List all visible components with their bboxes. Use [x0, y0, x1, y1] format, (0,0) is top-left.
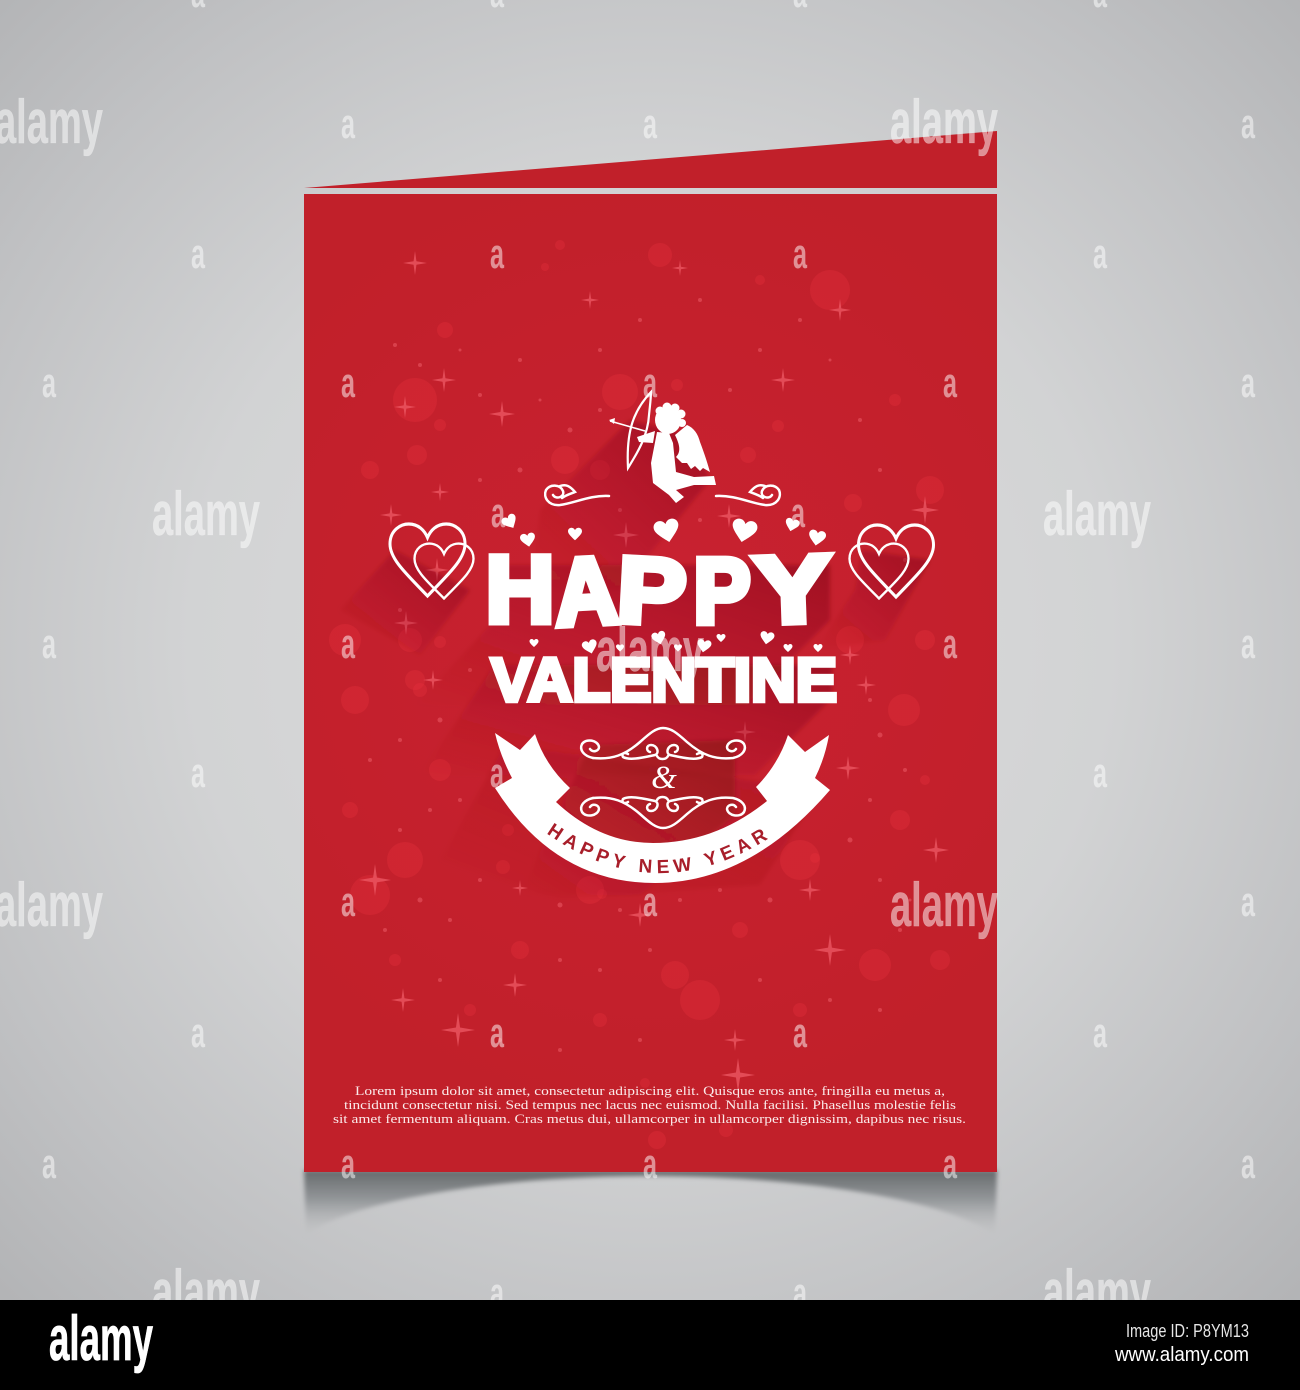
small watermark marks: a	[1093, 749, 1107, 796]
small watermark marks: a	[791, 489, 805, 536]
small watermark marks: a	[341, 878, 355, 925]
small watermark marks: a	[490, 230, 504, 277]
large watermarks: alamy	[152, 480, 260, 549]
title: HAPPY: P	[693, 539, 751, 643]
footer image id: Image ID: P8YM13	[1126, 1321, 1249, 1341]
long shadows	[340, 420, 930, 900]
small watermark marks: a	[191, 1009, 205, 1056]
large watermarks: alamy	[890, 871, 998, 940]
small hearts between title lines	[530, 630, 822, 655]
small watermark marks: a	[643, 100, 657, 147]
small watermark marks: a	[943, 359, 957, 406]
small watermark marks: a	[191, 230, 205, 277]
ribbon text: Happy New Year: HAPPY NEW YEAR	[547, 823, 768, 874]
small watermark marks: a	[341, 620, 355, 667]
ampersand: &	[651, 760, 677, 796]
small watermark marks: a	[1241, 878, 1255, 925]
card back flap	[304, 131, 997, 188]
title: HAPPY: P	[615, 537, 689, 645]
small watermark marks: a	[42, 1140, 56, 1187]
footer website: www.alamy.com	[1114, 1344, 1249, 1366]
large watermarks: alamy	[0, 871, 103, 940]
small watermark marks: a	[1093, 1009, 1107, 1056]
bokeh and sparkle texture	[329, 240, 950, 1149]
small watermark marks: a	[793, 1269, 807, 1316]
body text: lorem ipsum	[333, 1083, 966, 1126]
body text: lorem ipsum: tincidunt consectetur nisi. Sed tempus nec lacus nec euismod. Nulla facilisi. Phasellus molestie felis	[344, 1097, 956, 1112]
small watermark marks: a	[1241, 359, 1255, 406]
large watermarks: alamy	[890, 88, 998, 157]
footer bar	[0, 1300, 1300, 1390]
arrow	[609, 418, 645, 431]
small watermark marks: a	[1241, 620, 1255, 667]
small watermark marks: a	[793, 230, 807, 277]
card front panel	[304, 194, 997, 1172]
large watermarks	[0, 88, 1151, 1327]
ornament above ampersand	[581, 728, 745, 759]
icon: left double heart outline	[390, 524, 474, 598]
small watermark marks: a	[1241, 100, 1255, 147]
card floor shadow	[304, 1170, 997, 1236]
small watermark marks: a	[643, 878, 657, 925]
small watermark marks: a	[1093, 230, 1107, 277]
ornament below ampersand	[581, 797, 745, 828]
cupid wing	[675, 425, 710, 472]
small watermark marks: a	[490, 1009, 504, 1056]
small hearts above title	[500, 512, 827, 548]
small watermark marks: a	[341, 100, 355, 147]
small watermark marks: a	[793, 749, 807, 796]
title: HAPPY: Y	[752, 536, 833, 644]
large watermarks: alamy	[1043, 480, 1151, 549]
small watermark marks: a	[42, 359, 56, 406]
small watermark marks: a	[943, 1140, 957, 1187]
large watermarks: alamy	[0, 88, 103, 157]
cupid head and curls	[655, 402, 686, 434]
title: HAPPY: H	[486, 537, 554, 643]
small watermark marks: a	[341, 1140, 355, 1187]
title: HAPPY: A	[552, 537, 621, 646]
scroll ornaments beside cupid	[545, 485, 780, 505]
small watermark marks: a	[643, 359, 657, 406]
small watermark marks: a	[943, 620, 957, 667]
small watermark marks: a	[490, 749, 504, 796]
large watermarks: alamy	[152, 1258, 260, 1327]
large watermarks: alamy	[596, 616, 704, 685]
small watermark marks: a	[42, 620, 56, 667]
small watermark marks: a	[490, 1269, 504, 1316]
icon: right double heart outline	[850, 525, 934, 598]
large watermarks: alamy	[1043, 1258, 1151, 1327]
small watermark marks: a	[1241, 1140, 1255, 1187]
footer logo: alamy	[49, 1304, 153, 1374]
cupid body and legs	[651, 432, 716, 503]
title: VALENTINE: VALENTINE	[491, 646, 837, 714]
small watermark marks: a	[191, 749, 205, 796]
small watermark marks: a	[491, 489, 505, 536]
cupid arm	[637, 431, 655, 443]
bow	[628, 392, 651, 468]
icon: cupid with bow	[609, 392, 716, 503]
small watermark marks: a	[341, 359, 355, 406]
small watermark marks: a	[793, 1009, 807, 1056]
body text: lorem ipsum: Lorem ipsum dolor sit amet, consectetur adipiscing elit. Quisque eros ante, fringilla eu metus a,	[355, 1083, 945, 1098]
small watermark marks: a	[643, 1140, 657, 1187]
ribbon banner	[495, 733, 830, 883]
title: HAPPY	[486, 536, 833, 646]
body text: lorem ipsum: sit amet fermentum aliquam. Cras metus dui, ullamcorper in ullamcorper dignissim, dapibus nec risus.	[333, 1111, 966, 1126]
